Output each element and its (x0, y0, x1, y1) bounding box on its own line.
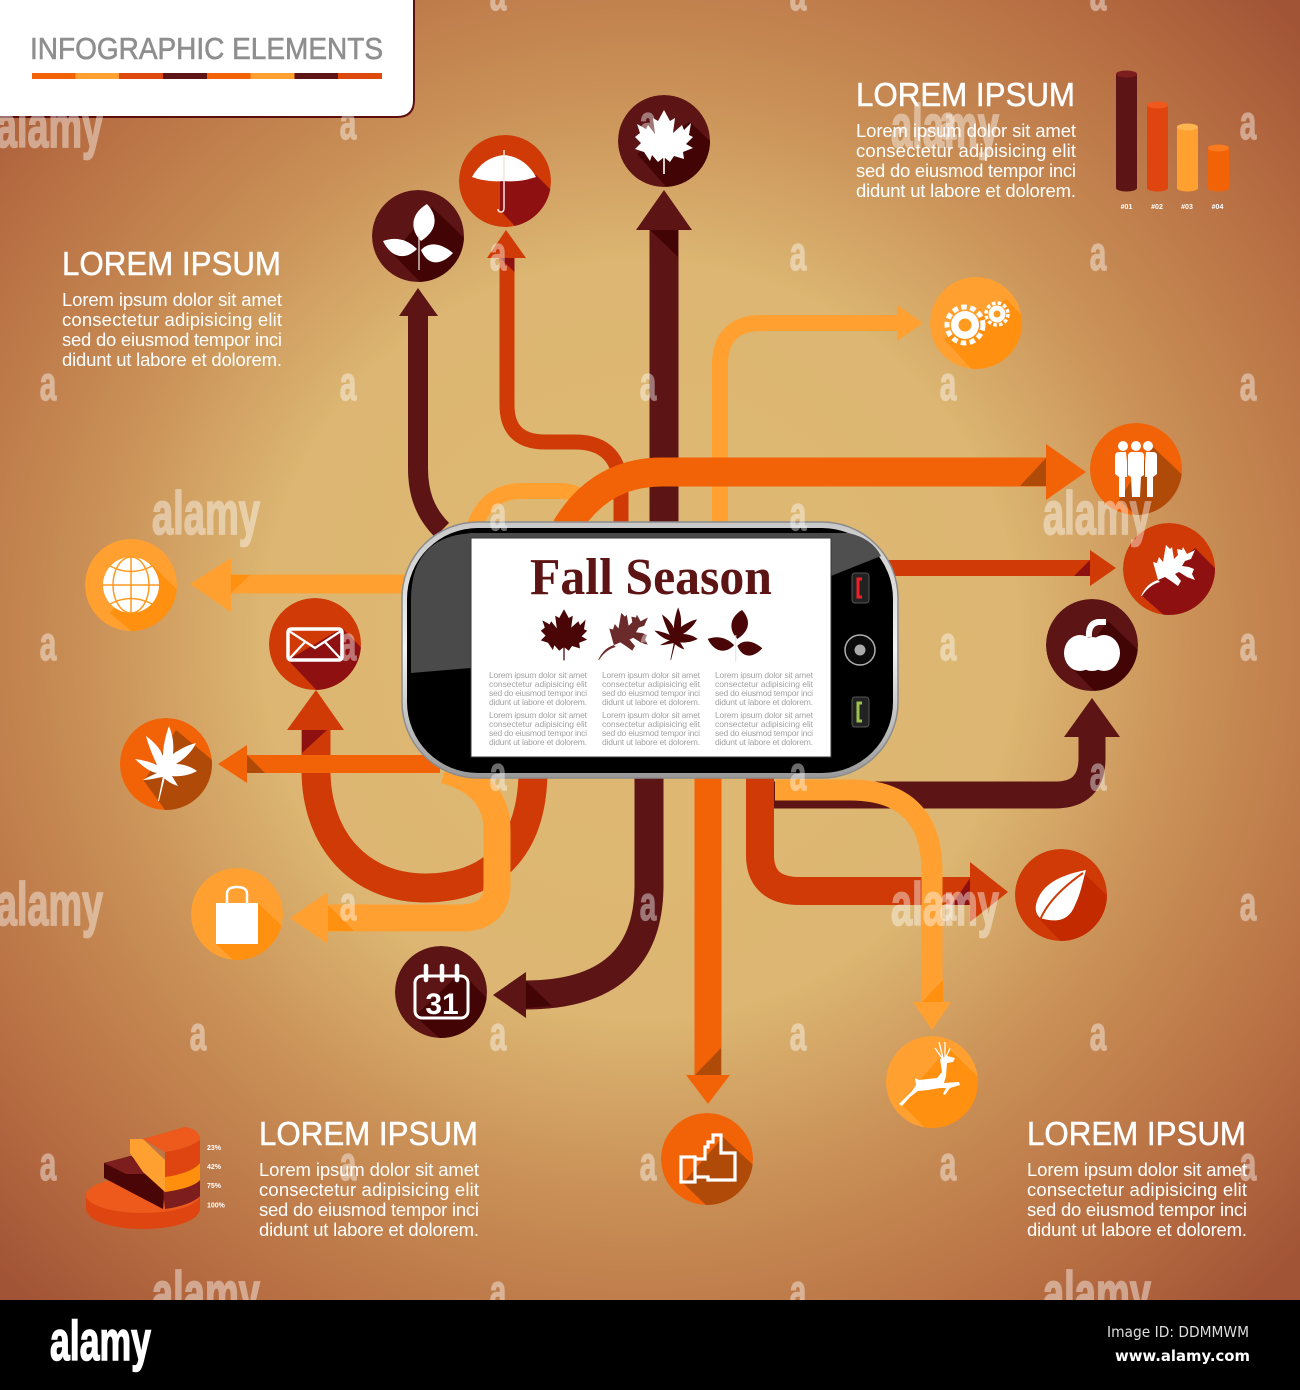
text block: top left: sed do eiusmod tempor inci (62, 329, 282, 350)
text block: top left: Lorem ipsum dolor sit amet (62, 289, 282, 310)
arrow: light orange to bag (290, 770, 497, 944)
text block: bottom left (259, 1115, 479, 1240)
bar chart: #01 (1121, 204, 1132, 211)
icon: maple leaf (618, 95, 710, 187)
icon: umbrella (459, 135, 551, 227)
screen text columns (489, 670, 814, 747)
icon: pumpkin (1046, 599, 1138, 691)
screen text columns: sed do eiusmod tempor inci (715, 728, 813, 738)
watermark: alamy wordmarks: alamy (0, 871, 103, 938)
screen text columns: didunt ut labore et dolorem. (602, 697, 700, 707)
screen text columns: consectetur adipisicing elit (489, 719, 588, 729)
arrow: dark to leaves (399, 288, 442, 530)
phone screen (471, 538, 831, 757)
watermark: alamy wordmarks (0, 93, 1151, 1327)
icon: leaf (1015, 849, 1107, 941)
screen text columns: consectetur adipisicing elit (602, 719, 701, 729)
footer url: www.alamy.com (1115, 1347, 1250, 1365)
3D pie chart: 100% (207, 1202, 226, 1210)
title text: INFOGRAPHIC ELEMENTS (30, 31, 383, 66)
text block: bottom right: didunt ut labore et dolorem. (1027, 1219, 1247, 1240)
arrow: orange to fall leaf (218, 745, 440, 783)
icon: people (1090, 423, 1182, 515)
icon: envelope (269, 598, 361, 690)
screen text columns: Lorem ipsum dolor sit amet (715, 710, 814, 720)
icon: gears (930, 277, 1022, 369)
3D pie chart: 23% (207, 1145, 222, 1152)
arrow: light orange to deer (775, 790, 951, 1030)
text block: bottom left: Lorem ipsum dolor sit amet (259, 1159, 479, 1180)
icon: leaves (372, 190, 464, 282)
icon: globe (85, 539, 177, 631)
phone red button (852, 573, 869, 603)
bar chart: #03 (1181, 204, 1193, 211)
arrow: dark to pumpkin (770, 698, 1120, 795)
bar chart (1116, 70, 1229, 211)
phone home button (845, 635, 875, 665)
screen text columns: sed do eiusmod tempor inci (715, 688, 813, 698)
screen text columns: consectetur adipisicing elit (715, 719, 814, 729)
text block: bottom left: LOREM IPSUM (259, 1115, 478, 1152)
text block: top right: didunt ut labore et dolorem. (856, 180, 1076, 201)
screen text columns: Lorem ipsum dolor sit amet (489, 670, 588, 680)
screen text columns: didunt ut labore et dolorem. (715, 737, 813, 747)
text block: top right: Lorem ipsum dolor sit amet (856, 120, 1076, 141)
footer image id: Image ID: DDMMWM (1107, 1323, 1249, 1341)
bar chart: #02 (1151, 204, 1163, 211)
screen text columns: Lorem ipsum dolor sit amet (602, 710, 701, 720)
icon: deer (886, 1036, 978, 1128)
screen text columns: sed do eiusmod tempor inci (602, 728, 700, 738)
screen text columns: sed do eiusmod tempor inci (602, 688, 700, 698)
icon: thumbs up (661, 1113, 753, 1205)
text block: bottom right: LOREM IPSUM (1027, 1115, 1246, 1152)
watermark: alamy wordmarks: alamy (1043, 1260, 1151, 1327)
screen text columns: Lorem ipsum dolor sit amet (489, 710, 588, 720)
screen text columns: consectetur adipisicing elit (715, 679, 814, 689)
text block: bottom right: sed do eiusmod tempor inci (1027, 1199, 1247, 1220)
arrow: red to leaf (760, 770, 1008, 922)
phone (402, 522, 898, 778)
text block: bottom left: didunt ut labore et dolorem. (259, 1219, 479, 1240)
text block: bottom right: Lorem ipsum dolor sit amet (1027, 1159, 1247, 1180)
arrow: red to umbrella (487, 230, 621, 525)
watermark: alamy wordmarks: alamy (0, 93, 103, 160)
screen text columns: didunt ut labore et dolorem. (489, 697, 587, 707)
screen text columns: Lorem ipsum dolor sit amet (602, 670, 701, 680)
text block: top left (62, 245, 282, 370)
title colour stripe (32, 73, 382, 79)
calendar date: 31 (425, 988, 459, 1021)
screen text columns: didunt ut labore et dolorem. (489, 737, 587, 747)
arrows network (190, 190, 1120, 1104)
screen text columns: Lorem ipsum dolor sit amet (715, 670, 814, 680)
screen text columns: didunt ut labore et dolorem. (602, 737, 700, 747)
arrow: light orange to gears (720, 305, 923, 525)
arrow: dark to calendar (493, 770, 649, 1018)
phone green button (852, 697, 869, 727)
title card (0, 0, 414, 117)
screen leaf icons (541, 607, 762, 662)
text block: top left: didunt ut labore et dolorem. (62, 349, 282, 370)
text block: top right: LOREM IPSUM (856, 76, 1075, 113)
icon: shopping bag (191, 868, 283, 960)
arrow: dark to maple leaf (636, 190, 692, 525)
icon: oak leaf (1123, 523, 1215, 615)
3D pie chart (86, 1127, 226, 1229)
text block: top left: LOREM IPSUM (62, 245, 281, 282)
screen text columns: sed do eiusmod tempor inci (489, 688, 587, 698)
text block: bottom left: consectetur adipisicing elit (259, 1179, 479, 1200)
arrow: red to oak leaf (880, 550, 1116, 586)
text block: top left: consectetur adipisicing elit (62, 309, 282, 330)
3D pie chart: 75% (207, 1183, 222, 1190)
footer logo: alamy (50, 1309, 151, 1372)
text block: bottom right: consectetur adipisicing elit (1027, 1179, 1247, 1200)
arrow: orange to thumbs up (686, 770, 730, 1104)
bar chart: #04 (1212, 204, 1223, 211)
screen text columns: sed do eiusmod tempor inci (489, 728, 587, 738)
screen text columns: didunt ut labore et dolorem. (715, 697, 813, 707)
phone gloss (411, 533, 478, 673)
screen text columns: consectetur adipisicing elit (602, 679, 701, 689)
watermark: alamy wordmarks: alamy (891, 93, 999, 160)
text block: bottom left: sed do eiusmod tempor inci (259, 1199, 479, 1220)
icon: fall leaf (120, 718, 212, 810)
screen text columns: consectetur adipisicing elit (489, 679, 588, 689)
arrow: red U to envelope (287, 690, 533, 888)
3D pie chart: 42% (207, 1164, 222, 1171)
watermark: alamy wordmarks: alamy (1043, 480, 1151, 547)
icon: calendar (395, 946, 487, 1038)
arrow: orange to people (566, 444, 1086, 528)
arrow: light orange to globe (190, 558, 420, 612)
text block: top right: sed do eiusmod tempor inci (856, 160, 1076, 181)
watermark: alamy wordmarks: alamy (152, 1260, 260, 1327)
text block: top right: consectetur adipisicing elit (856, 140, 1076, 161)
screen headline: Fall Season (530, 549, 772, 606)
watermark: alamy wordmarks: alamy (891, 871, 999, 938)
watermark: alamy wordmarks: alamy (152, 480, 260, 547)
text block: bottom right (1027, 1115, 1247, 1240)
arrow: light orange arch behind phone (475, 491, 594, 525)
text block: top right (856, 76, 1076, 201)
footer bar (0, 1300, 1300, 1390)
